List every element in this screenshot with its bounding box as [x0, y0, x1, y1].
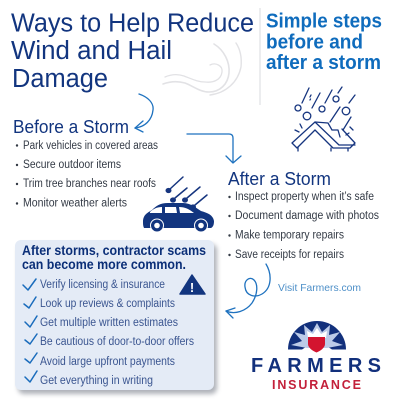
icon: car in hail: [143, 177, 214, 232]
heading: after a storm: After a Storm: [228, 169, 331, 189]
title: Ways to Help Reduce: [11, 10, 254, 38]
checklist: Verify licensing & insurance: [40, 279, 165, 291]
list: after a storm: Document damage with photos: [235, 210, 379, 222]
icon: hail on roof: [292, 87, 355, 151]
hail streaks: [166, 177, 207, 210]
logo shield: [308, 337, 325, 352]
heading: before a storm: Before a Storm: [13, 117, 129, 137]
list: before a storm: Park vehicles in covered areas: [23, 140, 158, 152]
divider: [259, 8, 261, 105]
heading: simple steps: [266, 10, 382, 74]
list: after a storm: [228, 191, 379, 261]
heading: simple steps: Simple steps: [266, 10, 382, 32]
checklist: [23, 279, 194, 387]
arrow: before to after: [187, 134, 241, 163]
panel: contractor scams: [15, 240, 217, 394]
title: Wind and Hail: [11, 37, 172, 65]
car body: [143, 203, 214, 228]
checklist: Get multiple written estimates: [40, 317, 178, 329]
list: after a storm: Make temporary repairs: [235, 230, 344, 242]
list: after a storm: Save receipts for repairs: [235, 249, 344, 261]
icon: warning triangle: !: [190, 280, 194, 295]
list: before a storm: Trim tree branches near roofs: [23, 178, 156, 190]
arrow: loop to panel: [226, 264, 270, 318]
panel heading: [22, 243, 206, 272]
title: [11, 10, 254, 93]
logo dome: [288, 321, 346, 352]
list: before a storm: [16, 140, 158, 210]
icon: wind swirl: [163, 43, 241, 95]
logo subtitle: INSURANCE: [272, 378, 361, 392]
checklist: Look up reviews & complaints: [40, 298, 175, 310]
checklist: Be cautious of door-to-door offers: [40, 336, 194, 348]
heading: simple steps: after a storm: [266, 52, 381, 74]
list: before a storm: Monitor weather alerts: [23, 198, 127, 210]
title: Damage: [12, 65, 108, 93]
logo wordmark: FARMERS: [251, 355, 381, 377]
link text: Visit Farmers.com: [278, 282, 361, 294]
arrow: title to before a storm: [135, 94, 153, 132]
heading: simple steps: before and: [266, 32, 363, 54]
panel heading: After storms, contractor scams: [22, 243, 206, 258]
logo: farmers insurance: [251, 321, 381, 392]
icon: warning triangle: [180, 275, 205, 295]
checklist: Get everything in writing: [40, 375, 153, 387]
panel heading: can become more common.: [22, 257, 186, 272]
checklist: Avoid large upfront payments: [40, 356, 175, 368]
list: before a storm: Secure outdoor items: [23, 159, 121, 171]
list: after a storm: Inspect property when it’s safe: [235, 191, 374, 203]
